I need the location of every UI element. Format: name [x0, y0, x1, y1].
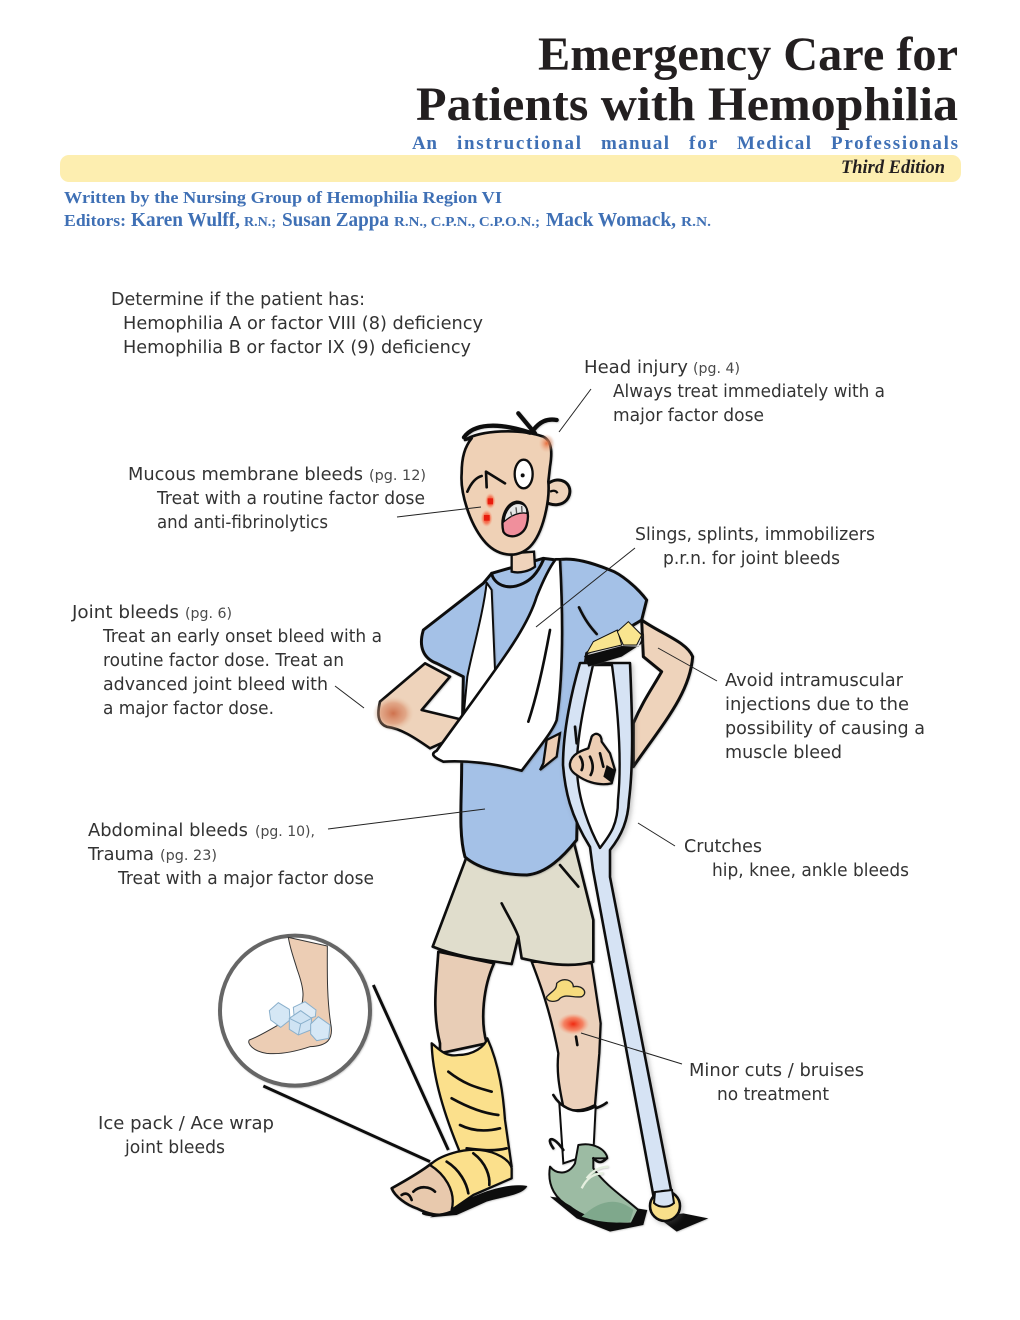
head [461, 413, 570, 555]
editors: Karen Wulff, [131, 209, 240, 231]
callout: head injury: Always treat immediately with a [613, 381, 885, 402]
magnifier inset: ice pack [220, 936, 370, 1086]
neck [512, 552, 535, 572]
editors: Editors: [64, 211, 126, 230]
callout: slings: p.r.n. for joint bleeds [663, 548, 840, 569]
title: Patients with Hemophilia [416, 78, 958, 131]
callout: joint bleeds: routine factor dose. Treat an [103, 650, 344, 671]
callout: head injury: Head injury [584, 357, 688, 378]
subtitle: Professionals [831, 133, 958, 154]
callout: head injury [584, 357, 885, 426]
nosebleed marks [481, 493, 496, 527]
callout: avoid injections: Avoid intramuscular [725, 670, 904, 691]
callout: joint bleeds [71, 602, 382, 719]
leg bandage [432, 1038, 512, 1190]
callout: slings [635, 524, 875, 569]
shirt [421, 558, 647, 875]
callout: joint bleeds: a major factor dose. [103, 698, 274, 719]
right arm [633, 620, 693, 767]
subtitle: instructional [457, 133, 581, 154]
mouth [502, 502, 528, 536]
editors: R.N.; [244, 215, 276, 230]
title: Emergency Care for [538, 28, 958, 81]
callout: avoid injections: possibility of causing a [725, 718, 925, 739]
callout: abdominal bleeds: Treat with a major factor dose [117, 868, 374, 889]
authors: Written by the Nursing Group of Hemophilia Region VI [64, 188, 502, 207]
callout: joint bleeds: Joint bleeds [71, 602, 179, 623]
subtitle: manual [601, 133, 669, 154]
text: determine the type: Hemophilia B or factor IX (9) deficiency [123, 337, 471, 358]
collar [492, 560, 543, 587]
callout: mucous membrane bleeds: (pg. 12) [369, 468, 426, 484]
callout: abdominal bleeds: (pg. 10), [255, 824, 315, 840]
editors: R.N., C.P.N., C.P.O.N.; [394, 215, 540, 230]
callout: abdominal bleeds: (pg. 23) [160, 848, 217, 864]
callout: abdominal bleeds: Trauma [87, 844, 154, 865]
eye [515, 460, 533, 488]
callout: crutches: Crutches [684, 836, 762, 857]
callout: head injury: (pg. 4) [693, 361, 740, 377]
editors: Susan Zappa [282, 209, 389, 231]
ear [543, 480, 570, 505]
edition banner [60, 155, 961, 182]
shorts [433, 840, 593, 965]
subtitle [412, 133, 958, 154]
sock [559, 1103, 596, 1163]
subtitle: for [689, 133, 718, 154]
callout: avoid injections: muscle bleed [725, 742, 842, 763]
shoe [549, 1139, 647, 1232]
left arm [373, 663, 463, 748]
patient figure: lower body [220, 840, 708, 1232]
callout: ice pack: Ice pack / Ace wrap [98, 1113, 274, 1134]
leader lines [328, 389, 717, 1064]
text: determine the type [111, 289, 483, 358]
left leg [435, 952, 494, 1053]
bandaid [547, 980, 585, 1001]
edition banner: Third Edition [841, 157, 945, 178]
callout: slings: Slings, splints, immobilizers [635, 524, 875, 545]
bruise [557, 1013, 589, 1045]
patient figure: upper body [373, 413, 693, 875]
patient figure: pad, hand and sling [433, 559, 644, 784]
text: determine the type: Hemophilia A or factor VIII (8) deficiency [123, 313, 483, 334]
callout: minor cuts: Minor cuts / bruises [689, 1060, 864, 1081]
callout: mucous membrane bleeds: Treat with a routine factor dose [156, 488, 425, 509]
magnifier lines [263, 985, 448, 1162]
crutch pad [579, 607, 644, 667]
callout: abdominal bleeds: Abdominal bleeds [88, 820, 248, 841]
callout: joint bleeds: advanced joint bleed with [103, 674, 328, 695]
callout: mucous membrane bleeds: Mucous membrane bleeds [128, 464, 363, 485]
callout: avoid injections: injections due to the [725, 694, 909, 715]
editors [64, 209, 711, 231]
callout: mucous membrane bleeds: and anti-fibrinolytics [157, 512, 328, 533]
crutch [563, 663, 680, 1221]
callout: crutches: hip, knee, ankle bleeds [712, 860, 909, 881]
editors: R.N. [681, 215, 711, 230]
callout: head injury: major factor dose [613, 405, 764, 426]
callout: ice pack [98, 1113, 274, 1158]
editors: Mack Womack, [546, 209, 676, 231]
callout: avoid injections [725, 670, 925, 763]
header [60, 28, 961, 231]
callout: ice pack: joint bleeds [124, 1137, 225, 1158]
sling [433, 559, 562, 771]
callout: joint bleeds: Treat an early onset bleed with a [102, 626, 382, 647]
subtitle: An [412, 133, 437, 154]
subtitle: Medical [737, 133, 811, 154]
text: determine the type: Determine if the patient has: [111, 289, 365, 310]
title [416, 28, 958, 131]
callout: crutches [684, 836, 909, 881]
hand on crutch [570, 727, 615, 784]
callout: minor cuts [689, 1060, 864, 1105]
callout: minor cuts: no treatment [717, 1084, 829, 1105]
callout: abdominal bleeds [87, 820, 374, 889]
crutch tip [650, 1190, 680, 1221]
bandaged foot [392, 1150, 527, 1217]
callout: mucous membrane bleeds [128, 464, 426, 533]
callout: joint bleeds: (pg. 6) [185, 606, 232, 622]
crutch foot [657, 1213, 708, 1232]
right leg [532, 962, 607, 1111]
